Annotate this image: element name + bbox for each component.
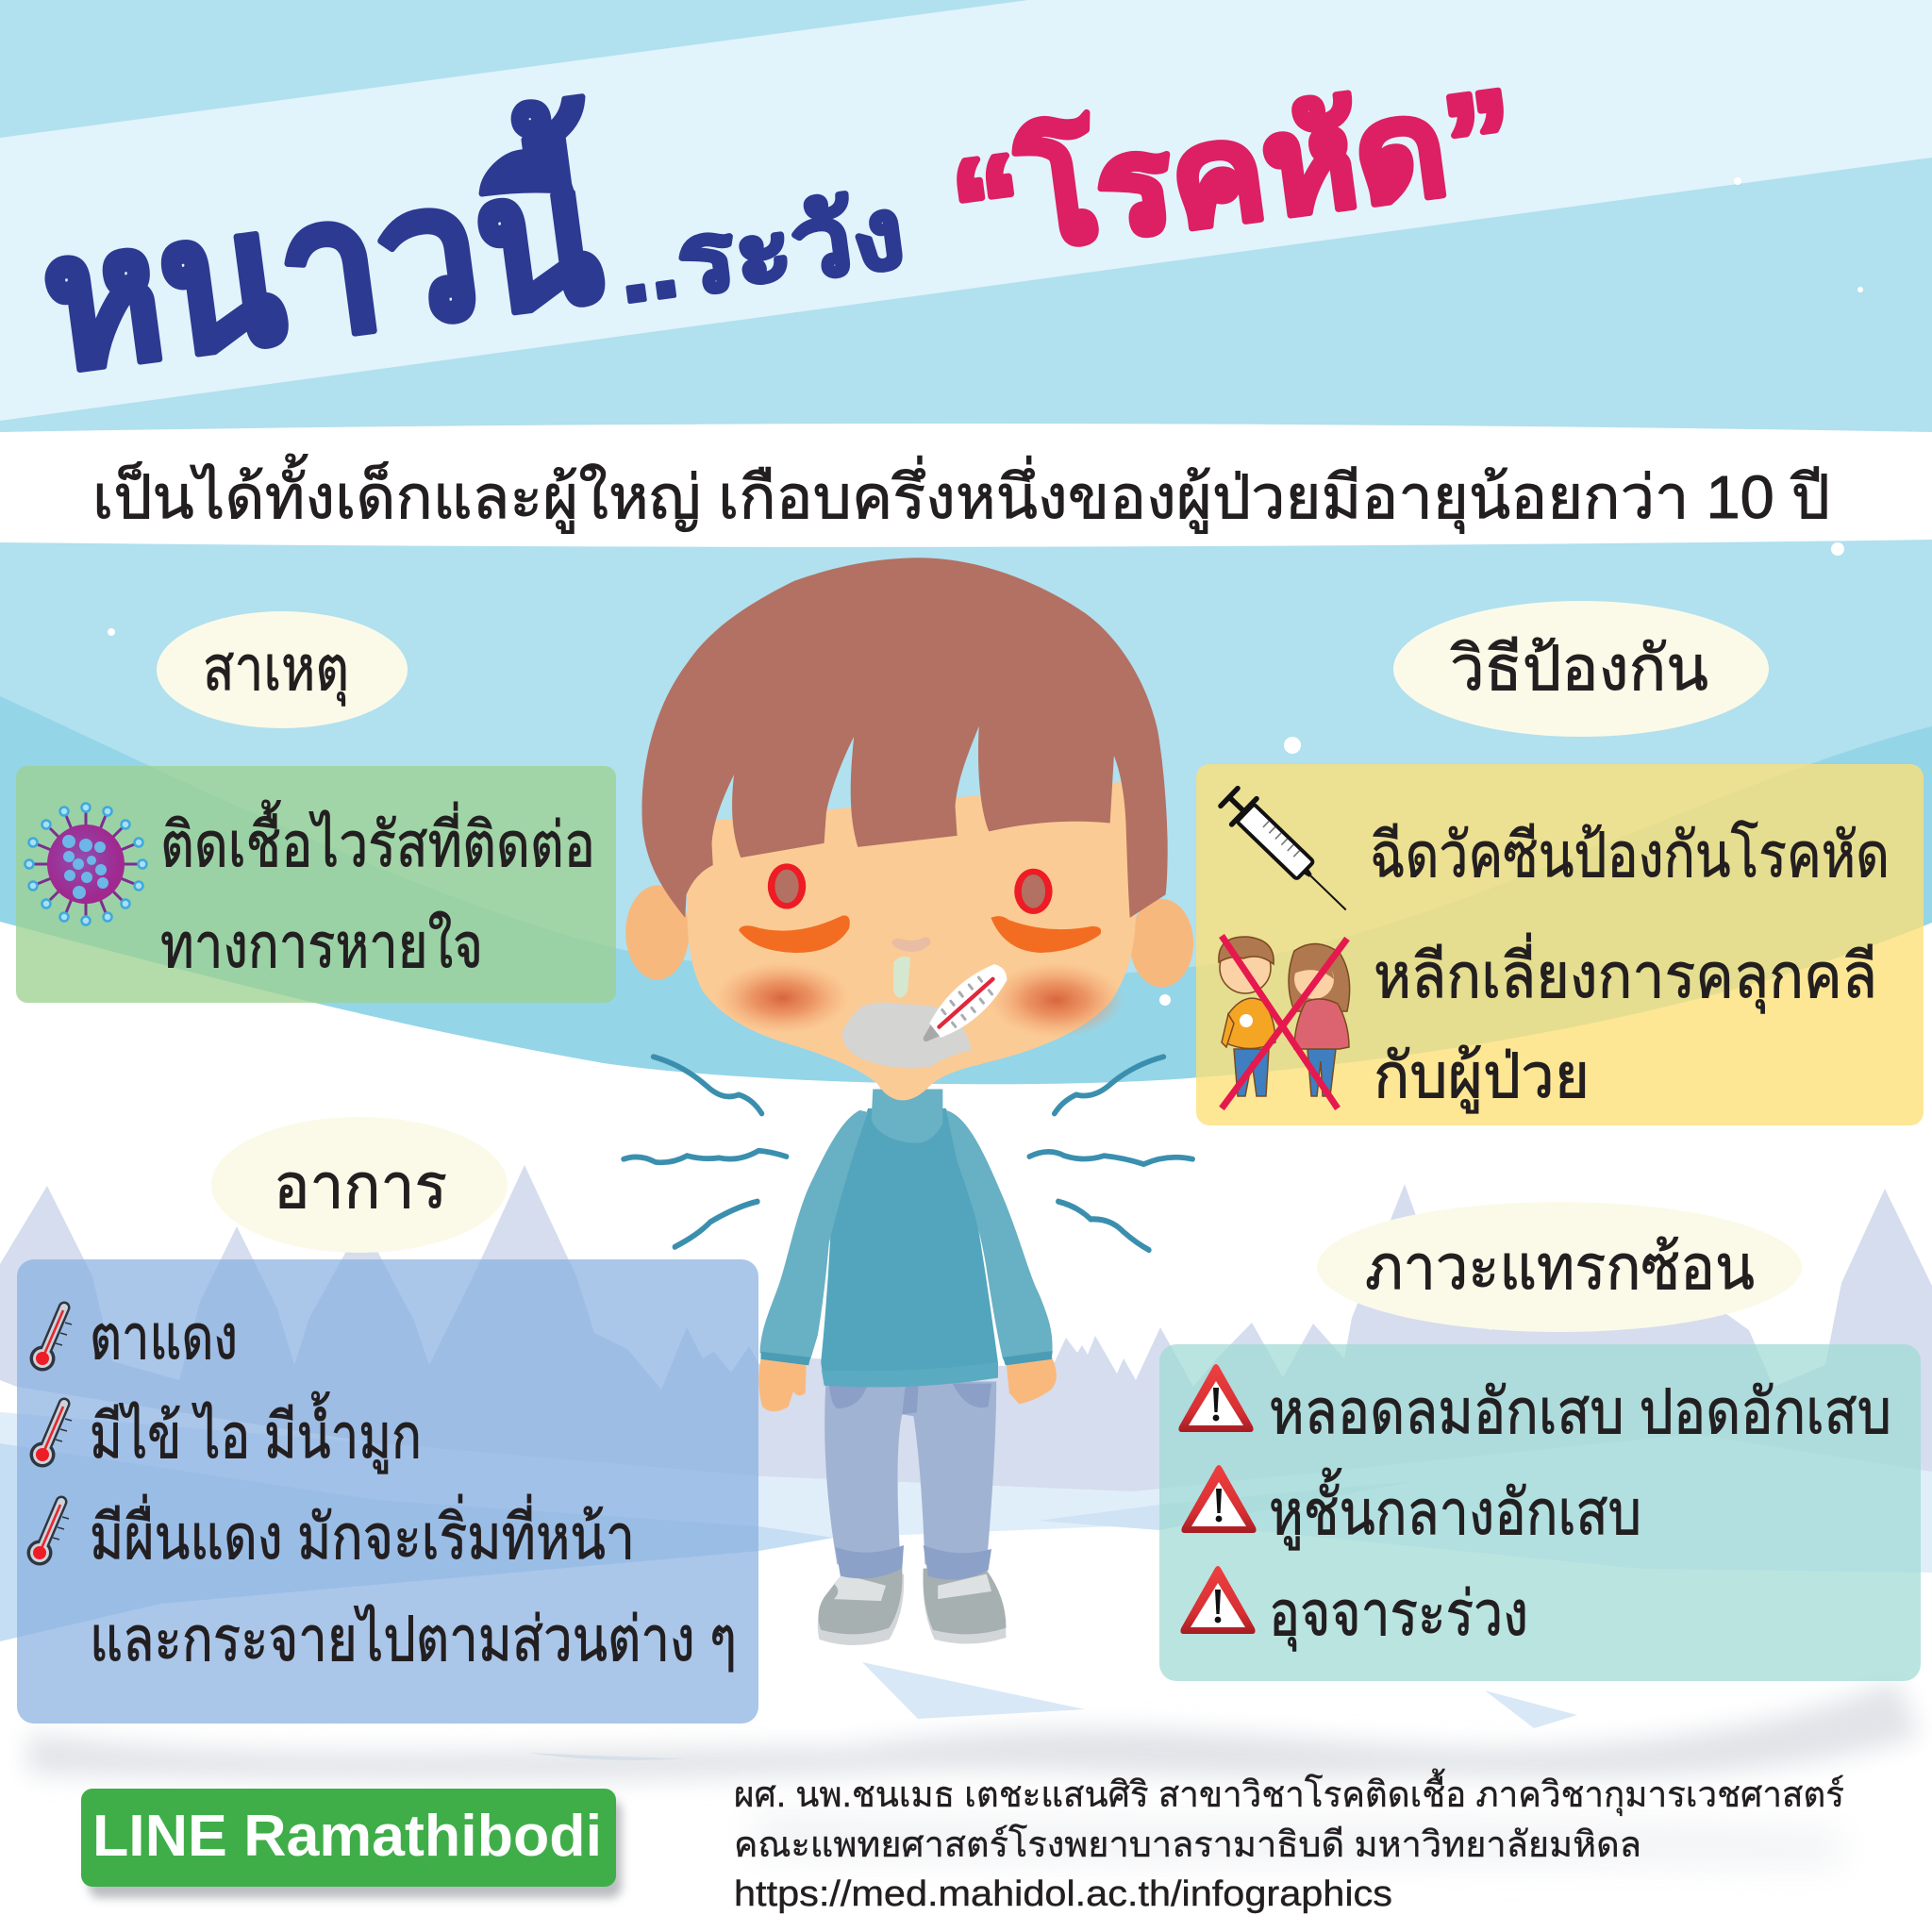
heading: prevention: วิธีป้องกัน (1450, 633, 1708, 703)
title: หนาวนี้..ระวัง "โรคหัด": “โรคหัด” (943, 58, 1524, 286)
icon: warning 1 (1178, 1364, 1254, 1432)
icon: thermometer 3 (26, 1502, 69, 1566)
shoes (818, 1568, 1007, 1645)
hands (758, 1357, 1057, 1411)
button: LINE Ramathibodi (81, 1789, 622, 1898)
icon: thermometer 2 (30, 1404, 72, 1468)
panel: symptoms: มีไข้ ไอ มีน้ำมูก (90, 1391, 422, 1474)
face (685, 781, 1136, 1100)
icon: virus (25, 804, 147, 924)
icon: warning 2 (1181, 1465, 1257, 1533)
panel: symptoms (17, 1259, 758, 1724)
icon: thermometer 1 (30, 1307, 72, 1372)
panel: cause (16, 766, 616, 1003)
heading: complications: ภาวะแทรกซ้อน (1365, 1232, 1755, 1302)
credits (734, 1768, 1844, 1914)
subtitle band (0, 424, 1932, 547)
head (625, 558, 1193, 1100)
heading: symptoms: อาการ (274, 1151, 447, 1221)
title: หนาวนี้..ระวัง "โรคหัด": ..ระวัง (611, 177, 910, 325)
heading: cause (157, 611, 408, 728)
panel: symptoms: ตาแดง (90, 1302, 238, 1372)
shiver lines (624, 1057, 1192, 1164)
panel: cause: ทางการหายใจ (160, 910, 483, 980)
heading: symptoms (211, 1117, 508, 1253)
panel: complications: หูชั้นกลางอักเสบ (1269, 1468, 1641, 1551)
mouth patch (842, 1003, 971, 1069)
credits: ผศ. นพ.ชนเมธ เตชะแสนศิริ สาขาวิชาโรคติดเชื้อ ภาควิชากุมารเวชศาสตร์ (734, 1768, 1844, 1816)
panel: cause: ติดเชื้อไวรัสที่ติดต่อ (160, 800, 595, 879)
panel: prevention (1196, 764, 1924, 1125)
icon: syringe (1217, 784, 1358, 923)
nose and runny mucus (891, 937, 931, 998)
red eyes (768, 863, 1053, 914)
panel: symptoms: มีผื่นแดง มักจะเริ่มที่หน้า (90, 1494, 635, 1572)
sweater (759, 1089, 1053, 1387)
thermometer in mouth (915, 956, 1014, 1053)
credits: คณะแพทยศาสตร์โรงพยาบาลรามาธิบดี มหาวิทยาลัยมหิดล (734, 1824, 1641, 1865)
rash (715, 962, 1124, 1038)
panel: prevention: หลีกเลี่ยงการคลุกคลี (1374, 933, 1877, 1014)
icon: two people crossed out (1219, 936, 1350, 1108)
body (758, 1089, 1057, 1645)
title: หนาวนี้..ระวัง "โรคหัด" (27, 58, 1524, 410)
illustration: sick boy (624, 558, 1193, 1645)
subtitle band: เป็นได้ทั้งเด็กและผู้ใหญ่ เกือบครึ่งหนึ่งของผู้ป่วยมีอายุน้อยกว่า 10 ปี (92, 454, 1830, 534)
credits: https://med.mahidol.ac.th/infographics (734, 1874, 1392, 1914)
ears (625, 886, 1193, 988)
hair (641, 558, 1168, 918)
heading: prevention (1393, 601, 1769, 737)
panel: symptoms: และกระจายไปตามส่วนต่าง ๆ (90, 1604, 737, 1674)
panel: complications (1159, 1344, 1921, 1681)
heading: complications (1317, 1202, 1802, 1332)
icon: warning 3 (1180, 1566, 1256, 1634)
heading: cause: สาเหตุ (203, 633, 349, 707)
under-eye swelling (739, 915, 1101, 953)
panel: complications: อุจจาระร่วง (1269, 1578, 1528, 1652)
panel: prevention: กับผู้ป่วย (1374, 1041, 1590, 1114)
jeans (824, 1382, 996, 1580)
title: หนาวนี้..ระวัง "โรคหัด": หนาวนี้ (27, 94, 614, 410)
button: LINE Ramathibodi: LINE Ramathibodi (92, 1804, 602, 1869)
